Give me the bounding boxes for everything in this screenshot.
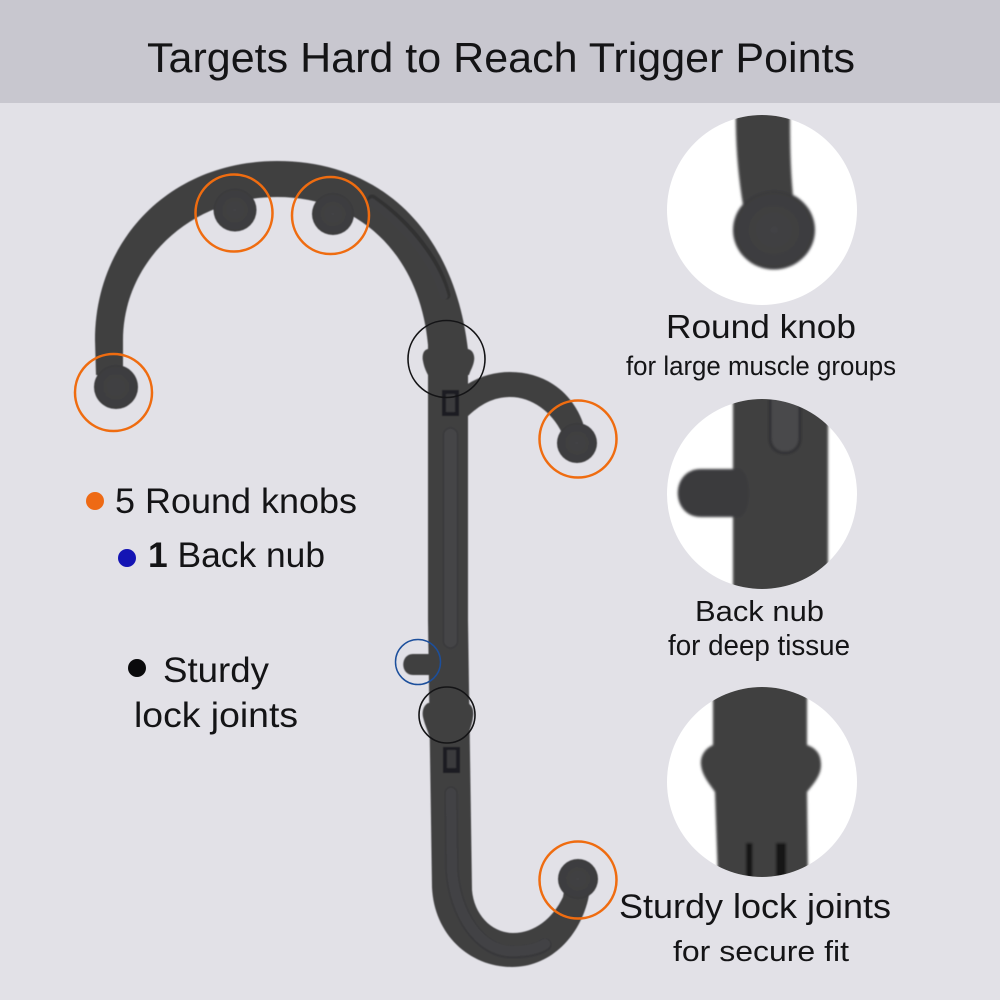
round knob heading: Round knob — [666, 308, 856, 345]
top knob one — [214, 188, 256, 232]
orange dot — [86, 492, 104, 510]
white circle — [667, 687, 857, 877]
legend: round knobs — [86, 482, 357, 521]
knob closeup — [733, 105, 815, 270]
legend: lock joints — [128, 651, 298, 735]
lock joint caption: for secure fit — [673, 936, 849, 968]
back nub — [403, 654, 432, 675]
blue ring: back nub — [396, 640, 440, 684]
massage hook product — [94, 161, 598, 967]
back nub caption: for deep tissue — [668, 630, 850, 662]
bottom knob — [558, 859, 598, 899]
header band — [0, 0, 1000, 103]
panel: back nub detail — [667, 395, 857, 662]
orange ring: right knob — [540, 400, 616, 478]
black dot — [128, 659, 146, 677]
title: Targets Hard to Reach Trigger Points — [147, 34, 855, 81]
blue dot — [118, 549, 136, 567]
sturdy label: Sturdy — [163, 651, 270, 690]
panel: round knob detail — [626, 105, 896, 381]
stem slot — [444, 428, 458, 648]
upper window — [442, 390, 459, 416]
orange ring: bottom knob — [540, 842, 616, 918]
white circle — [667, 115, 857, 305]
back nub heading: Back nub — [695, 596, 824, 628]
upper arc — [95, 161, 468, 400]
black ring: upper joint — [408, 320, 485, 398]
lock joints label: lock joints — [134, 696, 298, 735]
main stem and lower hook — [428, 360, 592, 967]
upper lock joint — [423, 349, 474, 375]
joint closeup — [701, 680, 821, 883]
orange ring: top knob two — [292, 177, 369, 254]
left knob — [94, 365, 138, 409]
orange ring: top knob one — [196, 174, 272, 252]
right knob — [557, 423, 597, 463]
lower lock joint — [423, 703, 473, 742]
white circle — [667, 399, 857, 589]
small arm — [466, 372, 584, 440]
lower window — [443, 747, 460, 773]
round knob caption: for large muscle groups — [626, 351, 896, 381]
lock joint heading: Sturdy lock joints — [619, 888, 891, 926]
black ring: lower joint — [419, 687, 475, 743]
legend: back nub — [118, 536, 325, 575]
orange ring: left knob — [75, 354, 152, 431]
panel: lock joint detail — [619, 680, 891, 968]
lower groove — [451, 793, 545, 952]
nub closeup — [678, 395, 828, 595]
round knobs label: 5 Round knobs — [115, 482, 357, 521]
back nub label: 1 Back nub — [148, 536, 325, 575]
arc groove — [372, 199, 446, 296]
top knob two — [312, 193, 354, 235]
